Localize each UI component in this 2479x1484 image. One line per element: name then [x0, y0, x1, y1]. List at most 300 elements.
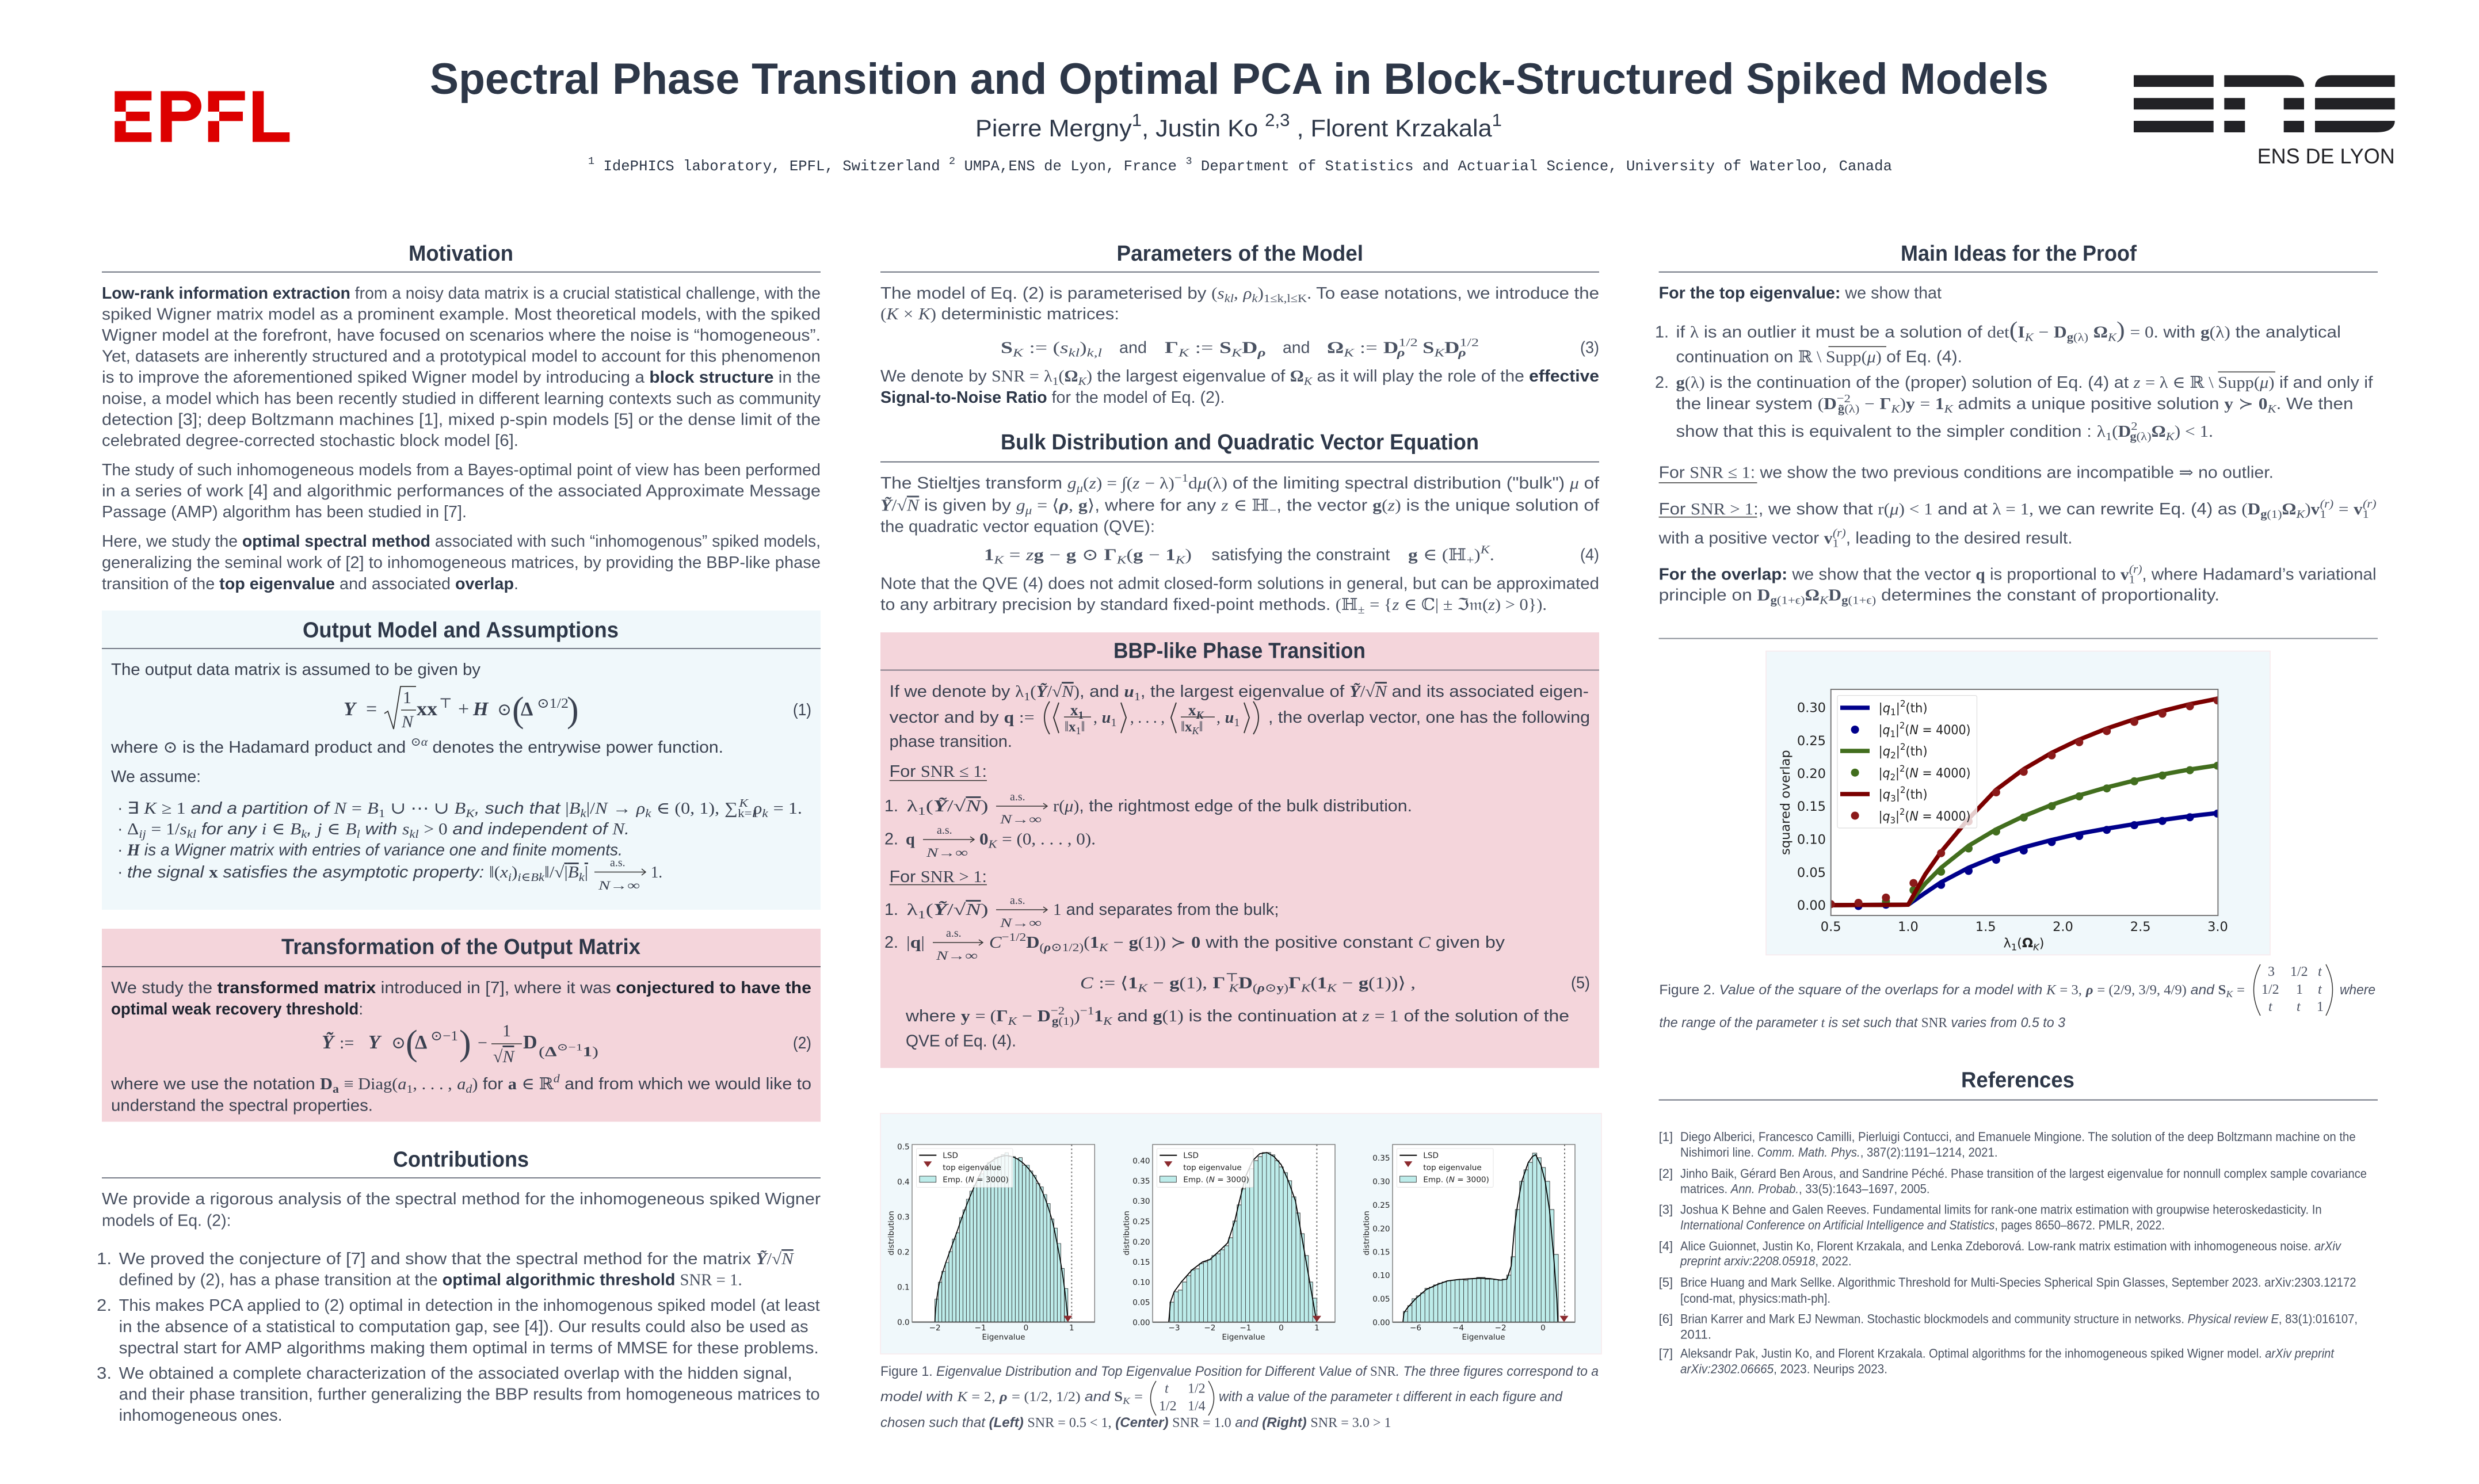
text block: motivation paragraphs: detection [3]; deep Boltzmann machines [1], mixed p-spin models [5] or the dense limit of the	[102, 411, 821, 429]
text: parameterisation: The model of Eq. (2) is parameterised by (skl, ρk)1≤k,l≤K. To ease notations, we introduce the	[880, 284, 1599, 305]
text: overlap: principle on Dg(1+ϵ)ΩKDg(1+ϵ) determines the constant of proportionality.	[1659, 586, 2219, 607]
text: overlap vector definition: , . . . ,	[1130, 709, 1165, 727]
reference 2: matrices. Ann. Probab., 33(5):1643–1697, 2005.	[1680, 1181, 1930, 1196]
text: overlap vector definition: x1	[1070, 701, 1084, 722]
equation 1	[344, 686, 811, 731]
panel: figure 1	[880, 1113, 1601, 1354]
chart: eigenvalue distribution, SNR 1.0: −3	[1168, 1323, 1180, 1333]
text: overlap vector definition: xK	[1188, 701, 1205, 722]
equation 2: (	[406, 1024, 418, 1063]
equation 4: g ∈ (ℍ +)K.	[1408, 543, 1494, 567]
panel: main ideas for the proof	[1655, 242, 2378, 639]
text: contributions intro: models of Eq. (2):	[102, 1212, 231, 1230]
equation 2: ⊙−1	[430, 1029, 458, 1044]
list: assumptions: H is a Wigner matrix with entries of variance one and finite moments.	[127, 841, 623, 860]
reference 1	[1659, 1130, 2356, 1159]
chart: eigenvalue distribution, SNR 1.0: 0.00	[1132, 1318, 1150, 1327]
chart: squared overlap: |q3|2(N = 4000)	[1879, 806, 1971, 826]
chart: eigenvalue distribution, SNR 3.0: 0.20	[1372, 1224, 1390, 1234]
text: case SNR above 1: with a positive vector v1(r), leading to the desired result.	[1658, 527, 2073, 550]
list: assumptions: Δij = 1/skl for any i ∈ Bk, j ∈ Bl with skl > 0 and independent of N.	[127, 820, 630, 841]
equation 1: (	[512, 691, 524, 730]
list: contributions: We proved the conjecture of [7] and show that the spectral method for the matrix Ỹ/√N	[119, 1250, 795, 1268]
reference 2: [2]	[1659, 1166, 1673, 1181]
list: contributions: This makes PCA applied to (2) optimal in detection in the inhomogenous spiked model (at least	[119, 1296, 820, 1315]
text: notation	[110, 1073, 811, 1115]
panel: figure 2	[1766, 651, 2270, 955]
chart: eigenvalue distribution, SNR 3.0: LSD	[1423, 1151, 1439, 1160]
caption: figure 1: chosen such that (Left) SNR = 0.5 < 1, (Center) SNR = 1.0 and (Right) SNR = 3.0 > 1	[880, 1415, 1391, 1430]
text block: motivation paragraphs: Here, we study the optimal spectral method associated with such “inhomogenous” spiked models,	[102, 532, 821, 551]
text: case SNR at most 1: 2.	[884, 830, 898, 848]
reference 6: 2011.	[1680, 1327, 1711, 1341]
caption: figure 2: where	[2340, 982, 2375, 998]
list: assumptions: N→∞	[598, 878, 640, 892]
equation 2: ⊙	[391, 1033, 406, 1052]
list: assumptions: ·	[117, 863, 123, 882]
list: contributions: We obtained a complete characterization of the associated overlap with the hidden signal,	[119, 1364, 792, 1383]
text: case SNR above 1: a.s.	[1010, 894, 1025, 907]
logo: ENS de Lyon	[2134, 75, 2395, 168]
equation 5	[1080, 971, 1590, 995]
chart: eigenvalue distribution, SNR 1.0: 0.05	[1132, 1298, 1150, 1307]
list: contributions: 3.	[97, 1364, 112, 1383]
caption: figure 1: 1/2	[1159, 1399, 1177, 1414]
heading: contributions: Contributions	[393, 1148, 529, 1172]
caption: figure 2: t	[2268, 999, 2273, 1014]
list: assumptions: ∃ K ≥ 1 and a partition of N = B1 ∪ ⋯ ∪ BK, such that |Bk|/N → ρk ∈ (0, 1), ∑k=1K ρk = 1.	[127, 797, 802, 820]
chart: eigenvalue distribution, SNR 1.0: 0.20	[1132, 1238, 1150, 1247]
caption: figure 1: t	[1165, 1382, 1169, 1397]
equation 3: (3)	[1580, 338, 1599, 357]
equation 3: Γ K := S KD ρ	[1165, 338, 1266, 360]
chart: eigenvalue distribution, SNR 0.5	[887, 1143, 1094, 1342]
chart: eigenvalue distribution, SNR 3.0: Emp. (N = 3000)	[1423, 1175, 1489, 1184]
chart: eigenvalue distribution, SNR 1.0: Eigenvalue	[1222, 1333, 1265, 1342]
chart: squared overlap: |q2|2(th)	[1879, 741, 1928, 761]
chart: squared overlap: squared overlap	[1778, 750, 1793, 855]
equation 1: Δ	[521, 699, 533, 720]
text: case SNR above 1: For SNR > 1:	[890, 868, 987, 886]
list: top eigenvalue steps: 2.	[1655, 373, 1669, 392]
chart: squared overlap	[1778, 689, 2228, 952]
list: assumptions	[117, 797, 802, 892]
heading: output model: Output Model and Assumptions	[303, 619, 619, 643]
caption: figure 2: 1	[2296, 982, 2303, 997]
text: case SNR at most 1: N→∞	[926, 845, 968, 860]
text block: motivation paragraphs: noise, a model which has been recently studied in different learning contexts such as community	[102, 390, 821, 408]
chart: squared overlap: 2.5	[2130, 920, 2151, 934]
text: transformed matrix	[111, 979, 811, 1018]
reference 4: Alice Guionnet, Justin Ko, Florent Krzakala, and Lenka Zdeborová. Low-rank matrix estimation with inhomogeneous noise. arXiv	[1680, 1239, 2342, 1253]
equation 3	[1001, 336, 1599, 360]
equation 2: :=	[340, 1033, 354, 1052]
chart: eigenvalue distribution, SNR 1.0: −1	[1240, 1323, 1251, 1333]
equation 2: 1	[502, 1021, 511, 1040]
caption: figure 2: the range of the parameter t is set such that SNR varies from 0.5 to 3	[1659, 1015, 2066, 1031]
chart: eigenvalue distribution, SNR 1.0: 0	[1279, 1323, 1284, 1333]
text: QVE note: Note that the QVE (4) does not admit closed-form solutions in general, but can be approximated	[880, 575, 1599, 593]
list: assumptions: 1.	[651, 864, 662, 882]
reference 7: Aleksandr Pak, Justin Ko, and Florent Krzakala. Optimal algorithms for the inhomogeneous spiked Wigner model. arXiv preprint	[1680, 1346, 2335, 1361]
equation 1: ⊙	[497, 700, 512, 719]
reference 2	[1659, 1166, 2367, 1196]
list: top eigenvalue steps: if λ is an outlier it must be a solution of det(IK − Dg(λ) ΩK) = 0. with g(λ) the analytical	[1676, 317, 2341, 344]
text: case SNR above 1: λ 1(Ỹ/√ N )	[907, 901, 989, 921]
text: case SNR above 1: 1 and separates from the bulk;	[1053, 901, 1279, 919]
text: case SNR at most 1: N→∞	[1000, 812, 1042, 826]
chart: eigenvalue distribution, SNR 3.0	[1362, 1145, 1575, 1342]
chart: eigenvalue distribution, SNR 1.0: 0.15	[1132, 1258, 1150, 1267]
text: case SNR above 1: N→∞	[1000, 915, 1042, 930]
text: we assume: We assume:	[111, 768, 201, 786]
panel: BBP-like phase transition	[880, 632, 1599, 1068]
list: top eigenvalue steps: the linear system (D−2g̃(λ) − ΓK)y = 1K admits a unique positive solution y ≻ 0K. We then	[1676, 392, 2354, 415]
chart: eigenvalue distribution, SNR 1.0: 0.10	[1132, 1278, 1150, 1287]
chart: squared overlap: 0.30	[1797, 701, 1826, 716]
list: top eigenvalue steps: 1.	[1655, 323, 1669, 342]
heading: BBP: BBP-like Phase Transition	[1113, 639, 1366, 663]
text: overlap vector definition	[890, 682, 1590, 751]
text: case SNR above 1	[884, 868, 1505, 963]
equation 2: (2)	[793, 1034, 811, 1052]
equation 1: =	[366, 699, 377, 720]
caption: figure 2: 3	[2268, 964, 2275, 979]
chart: eigenvalue distribution, SNR 1.0: distribution	[1122, 1211, 1131, 1256]
caption: figure 2: 1/2	[2261, 982, 2279, 997]
text: definition of y: QVE of Eq. (4).	[906, 1032, 1016, 1051]
heading: bulk distribution: Bulk Distribution and Quadratic Vector Equation	[1001, 430, 1479, 455]
panel: references	[1659, 1068, 2378, 1376]
text: overlap vector definition: , the overlap vector, one has the following	[1268, 708, 1590, 727]
text block: motivation paragraphs: celebrated degree-corrected stochastic block model [6].	[102, 432, 518, 450]
text: overlap vector definition: , u1	[1093, 708, 1116, 729]
text: overlap vector definition: , u1	[1216, 708, 1240, 729]
text: transformed matrix: optimal weak recovery threshold:	[111, 1000, 363, 1018]
text block: motivation paragraphs: Yet, datasets are inherently structured and a prototypical model to account for this phenomenon	[102, 348, 821, 366]
chart: eigenvalue distribution, SNR 0.5: −1	[975, 1323, 986, 1333]
equation 4	[984, 543, 1599, 567]
caption: figure 2: 1	[2317, 999, 2324, 1014]
text: overlap vector definition: phase transition.	[890, 733, 1012, 751]
equation 5: (5)	[1571, 974, 1590, 992]
chart: eigenvalue distribution, SNR 3.0: −2	[1495, 1323, 1507, 1333]
reference 6: Brian Karrer and Mark EJ Newman. Stochastic blockmodels and community structure in networks. Physical review E, 83(1):016107,	[1680, 1312, 2358, 1326]
caption: figure 2: t	[2318, 982, 2322, 997]
list: contributions	[97, 1250, 820, 1425]
chart: squared overlap: 1.5	[1975, 920, 1996, 934]
chart: eigenvalue distribution, SNR 0.5: 0.2	[897, 1248, 910, 1257]
chart: eigenvalue distribution, SNR 3.0: 0	[1540, 1323, 1546, 1333]
reference 2: Jinho Baik, Gérard Ben Arous, and Sandrine Péché. Phase transition of the largest eigenvalue for nonnull complex sample covariance	[1680, 1166, 2367, 1181]
text: case SNR above 1: a.s.	[946, 927, 962, 940]
equation 2: −	[478, 1033, 487, 1052]
chart: eigenvalue distribution, SNR 1.0: 0.25	[1132, 1218, 1150, 1227]
equation 4: 1K = zg − g ⊙ ΓK(g − 1K)	[984, 546, 1192, 567]
text block: motivation paragraphs: Passage (AMP) algorithm has been studied in [7].	[102, 503, 467, 521]
caption: figure 1: 1/4	[1188, 1399, 1206, 1414]
list: contributions: and their phase transition, further generalizing the BBP results from homogeneous matrices to	[119, 1385, 820, 1403]
list: assumptions: ·	[117, 841, 123, 860]
reference 5: [5]	[1659, 1275, 1673, 1290]
chart: eigenvalue distribution, SNR 0.5: Emp. (N = 3000)	[943, 1175, 1009, 1184]
equation 2: Ỹ	[322, 1032, 335, 1053]
text: contributions intro: We provide a rigorous analysis of the spectral method for the inhomogeneous spiked Wigner	[102, 1190, 821, 1208]
chart: squared overlap: 0.25	[1797, 734, 1826, 749]
chart: squared overlap: 0.5	[1821, 920, 1841, 934]
text: case SNR above 1: For SNR > 1 :, we show that r(μ) < 1 and at λ = 1, we can rewrite Eq. (4) as (Dg(1)ΩK)v1(r) = v1(r)	[1659, 498, 2377, 521]
text: case SNR above 1: |q|	[906, 934, 925, 952]
caption: figure 1: 1/2	[1188, 1382, 1206, 1397]
text: SNR definition: Signal-to-Noise Ratio for the model of Eq. (2).	[880, 388, 1225, 407]
equation 5: C := ⟨ 1K − g(1), Γ⊤KD(ρ⊙y)ΓK(1K − g(1))⟩ ,	[1080, 971, 1416, 995]
equation 3: and	[1119, 338, 1147, 357]
list: contributions: inhomogeneous ones.	[119, 1406, 283, 1425]
reference 3	[1659, 1203, 2322, 1233]
chart: eigenvalue distribution, SNR 0.5: 0.0	[897, 1318, 910, 1327]
text: case SNR at most 1: 1.	[884, 797, 898, 815]
text block: motivation paragraphs: The study of such inhomogeneous models from a Bayes-optimal point of view has been performed	[102, 461, 821, 479]
text: case SNR at most 1: 0K = (0, . . . , 0).	[979, 830, 1096, 851]
heading: references: References	[1961, 1068, 2074, 1092]
reference 5: Brice Huang and Mark Sellke. Algorithmic Threshold for Multi-Species Spherical Spin Glasses, September 2023. arXiv:2303.12172	[1680, 1275, 2356, 1290]
equation 2: D	[523, 1032, 537, 1053]
text: overlap vector definition: ‖xK‖	[1181, 719, 1203, 737]
equation 2: )	[459, 1024, 471, 1063]
equation 4: satisfying the constraint	[1212, 546, 1390, 564]
chart: eigenvalue distribution, SNR 3.0: 0.15	[1372, 1248, 1390, 1257]
reference 4: [4]	[1659, 1239, 1673, 1253]
authors: Pierre Mergny 1, Justin Ko 2,3 , Florent Krzakala 1	[975, 111, 1502, 142]
text: SNR definition: We denote by SNR = λ1(ΩK) the largest eigenvalue of ΩK as it will play the role of the effective	[880, 367, 1599, 388]
equation 4: (4)	[1580, 546, 1599, 564]
chart: squared overlap: 0.10	[1797, 832, 1826, 847]
chart: eigenvalue distribution, SNR 1.0: 1	[1314, 1323, 1319, 1333]
list: assumptions: the signal x satisfies the asymptotic property: ‖(xi)i∈Bk‖/√|Bk|	[127, 863, 588, 884]
chart: eigenvalue distribution, SNR 0.5: 0.4	[897, 1178, 910, 1187]
text: case SNR at most 1: a.s.	[1010, 791, 1025, 803]
caption: figure 1	[880, 1364, 1599, 1430]
text: QVE note: to any arbitrary precision by standard fixed-point methods. (ℍ± = {z ∈ ℂ| ± ℑ𝔪( z) > 0}).	[880, 596, 1547, 616]
chart: squared overlap: λ1(ΩK)	[2004, 936, 2044, 952]
text: parameterisation: (K × K) deterministic matrices:	[880, 305, 1119, 323]
panel: transformation of the output matrix	[102, 929, 821, 1121]
chart: squared overlap: |q1|2(th)	[1879, 698, 1928, 718]
equation 3: Ω K := D 1/2ρ SKD 1/2ρ	[1327, 336, 1479, 360]
chart: eigenvalue distribution, SNR 0.5: 0	[1024, 1323, 1028, 1333]
text: stieltjes transform: The Stieltjes transform gμ(z) = ∫(z − λ)−1dμ(λ) of the limiting spectral distribution ("bulk") μ of	[880, 472, 1599, 495]
text: overlap vector definition: If we denote by λ1(Ỹ/√N), and u1, the largest eigenvalue of Ỹ/√N and its associated eigen-	[890, 682, 1589, 703]
chart: squared overlap: 0.15	[1797, 799, 1826, 814]
affiliations: 1 IdePHICS laboratory, EPFL, Switzerland 2 UMPA,ENS de Lyon, France 3 Department of Statistics and Actuarial Science, University of Waterloo, Canada	[588, 155, 1892, 175]
chart: squared overlap: 1.0	[1898, 920, 1919, 934]
chart: eigenvalue distribution, SNR 3.0: distribution	[1362, 1211, 1371, 1256]
equation 1: ⊙1/2	[537, 696, 569, 711]
equation 1: )	[567, 691, 579, 730]
chart: squared overlap: 0.00	[1797, 898, 1826, 913]
reference 7: arXiv:2302.06665, 2023. Neurips 2023.	[1680, 1361, 1887, 1376]
caption: figure 1: with a value of the parameter t different in each figure and	[1219, 1389, 1563, 1405]
equation 1: (1)	[793, 701, 811, 719]
reference 1: Diego Alberici, Francesco Camilli, Pierluigi Contucci, and Emanuele Mingione. The solution of the deep Boltzmann machine on the	[1680, 1130, 2356, 1144]
chart: squared overlap: 0.20	[1797, 766, 1826, 781]
chart: eigenvalue distribution, SNR 1.0: 0.35	[1132, 1177, 1150, 1186]
chart: squared overlap: |q3|2(th)	[1879, 784, 1928, 804]
chart: eigenvalue distribution, SNR 1.0: top eigenvalue	[1183, 1163, 1242, 1172]
text: case SNR above 1	[1658, 498, 2377, 550]
panel: contributions	[97, 1148, 821, 1425]
text: case SNR at most 1: For SNR ≤ 1: we show the two previous conditions are incompatible ⇒ no outlier.	[1659, 464, 2274, 482]
text: case SNR at most 1: λ 1(Ỹ/√ N )	[907, 797, 989, 818]
text: case SNR at most 1: For SNR ≤ 1:	[890, 762, 987, 781]
equation 2: Δ	[415, 1032, 427, 1053]
list: contributions: 2.	[97, 1296, 112, 1315]
caption: figure 2: t	[2318, 964, 2322, 979]
text: contributions intro	[102, 1190, 821, 1230]
caption: figure 2	[1659, 964, 2375, 1031]
chart: eigenvalue distribution, SNR 3.0: 0.25	[1372, 1201, 1390, 1210]
text: case SNR above 1: C−1/2D(ρ⊙1/2 )(1K − g(1)) ≻ 0 with the positive constant C given by	[989, 931, 1505, 954]
reference 1: Nishimori line. Comm. Math. Phys., 387(2):1191–1214, 2021.	[1680, 1145, 1998, 1159]
caption: figure 2: 1/2	[2290, 964, 2308, 979]
text: stieltjes transform: the quadratic vector equation (QVE):	[880, 518, 1155, 536]
text: overlap vector definition: ‖x1‖	[1065, 719, 1085, 737]
text block: motivation paragraphs	[102, 284, 821, 593]
list: assumptions: a.s.	[610, 857, 626, 869]
text block: motivation paragraphs: in a series of work [4] and algorithmic performances of the associated Approximate Message	[102, 482, 821, 501]
chart: squared overlap: 0.05	[1797, 865, 1826, 880]
text: top eigenvalue: For the top eigenvalue: we show that	[1659, 284, 1942, 303]
reference 5	[1659, 1275, 2356, 1306]
reference 3: Joshua K Behne and Galen Reeves. Fundamental limits for rank-one matrix estimation with groupwise heteroskedasticity. In	[1680, 1203, 2322, 1217]
caption: figure 1: model with K = 2, ρ = (1/2, 1/2) and SK =	[880, 1389, 1143, 1406]
text block: motivation paragraphs: generalizing the seminal work of [2] to inhomogeneous matrices, by providing the BBP-like phase	[102, 554, 821, 572]
text: hadamard note: where ⊙ is the Hadamard product and ⊙α denotes the entrywise power function.	[110, 736, 723, 757]
chart: eigenvalue distribution, SNR 1.0: 0.30	[1132, 1197, 1150, 1206]
chart: squared overlap: |q2|2(N = 4000)	[1879, 763, 1971, 783]
equation 1: xx	[417, 699, 437, 720]
chart: eigenvalue distribution, SNR 0.5: −2	[929, 1323, 941, 1333]
chart: eigenvalue distribution, SNR 3.0: 0.35	[1372, 1154, 1390, 1163]
reference 4: preprint arxiv:2208.05918, 2022.	[1680, 1254, 1852, 1268]
equation 1: ⊤	[439, 696, 452, 711]
chart: eigenvalue distribution, SNR 1.0: −2	[1204, 1323, 1215, 1333]
chart: eigenvalue distribution, SNR 3.0: −6	[1410, 1323, 1421, 1333]
chart: eigenvalue distribution, SNR 0.5: distribution	[887, 1211, 896, 1256]
panel: output model and assumptions	[102, 611, 821, 910]
panel: bulk distribution and QVE	[880, 430, 1599, 616]
text: stieltjes transform: Ỹ/√N is given by gμ = ⟨ρ, g⟩, where for any z ∈ ℍ −, the vector g(z) is the unique solution of	[880, 496, 1599, 517]
equation 2: √N	[493, 1047, 515, 1066]
chart: eigenvalue distribution, SNR 1.0: Emp. (N = 3000)	[1183, 1175, 1249, 1184]
text: QVE note	[880, 575, 1599, 616]
chart: squared overlap: |q1|2(N = 4000)	[1879, 720, 1971, 739]
chart: eigenvalue distribution, SNR 3.0: top eigenvalue	[1423, 1163, 1482, 1172]
chart: eigenvalue distribution, SNR 1.0: LSD	[1183, 1151, 1199, 1160]
chart: eigenvalue distribution, SNR 0.5: 0.3	[897, 1213, 910, 1222]
logo: ENS de Lyon: ENS DE LYON	[2257, 144, 2395, 168]
list: top eigenvalue steps: show that this is equivalent to the simpler condition : λ1(D2g(λ)ΩK) < 1.	[1676, 420, 2213, 443]
chart: eigenvalue distribution, SNR 0.5: 0.1	[897, 1283, 910, 1292]
chart: squared overlap: 3.0	[2207, 920, 2228, 934]
chart: eigenvalue distribution, SNR 0.5: Eigenvalue	[982, 1333, 1025, 1342]
list: top eigenvalue steps: continuation on ℝ \ Supp(μ) of Eq. (4).	[1676, 348, 1962, 367]
reference 3: International Conference on Artificial Intelligence and Statistics, pages 8650–8672. PMLR, 2022.	[1680, 1218, 2165, 1233]
text: stieltjes transform	[880, 472, 1599, 536]
heading: main ideas: Main Ideas for the Proof	[1901, 242, 2137, 266]
equation 1: N	[401, 712, 414, 731]
reference 1: [1]	[1659, 1130, 1673, 1144]
text block: motivation paragraphs: transition of the top eigenvalue and associated overlap.	[102, 575, 518, 593]
chart: eigenvalue distribution, SNR 3.0: 0.00	[1372, 1318, 1390, 1327]
list: contributions: in the absence of a statistical to computation gap, see [4]). Our results could also be used as	[119, 1318, 808, 1336]
text: SNR definition	[880, 367, 1599, 407]
chart: eigenvalue distribution, SNR 3.0: 0.10	[1372, 1271, 1390, 1280]
equation 1: Y	[344, 699, 357, 720]
chart: eigenvalue distribution, SNR 1.0: 0.40	[1132, 1157, 1150, 1166]
text: transformed matrix: We study the transformed matrix introduced in [7], where it was conjectured to have the	[111, 979, 811, 997]
chart: eigenvalue distribution, SNR 3.0: 0.05	[1372, 1295, 1390, 1304]
reference 4	[1659, 1239, 2342, 1268]
equation 1: 1	[403, 688, 411, 707]
text block: motivation paragraphs: Low-rank information extraction from a noisy data matrix is a crucial statistical challenge, with the	[102, 284, 821, 303]
heading: transformation: Transformation of the Output Matrix	[281, 935, 640, 959]
panel: parameters of the model	[880, 242, 1599, 407]
list: assumptions: ·	[117, 799, 123, 818]
reference 6: [6]	[1659, 1312, 1673, 1326]
equation 1: +	[458, 699, 469, 720]
list: contributions: defined by (2), has a phase transition at the optimal algorithmic threshold SNR = 1.	[119, 1271, 742, 1290]
text: parameterisation	[880, 284, 1599, 323]
title: Spectral Phase Transition and Optimal PCA in Block-Structured Spiked Models	[430, 55, 2049, 104]
chart: squared overlap: 2.0	[2053, 920, 2073, 934]
text block: motivation paragraphs: Wigner model at the forefront, have focused on scenarios where the noise is “homogeneous”.	[102, 326, 821, 345]
logo: EPFL	[115, 91, 289, 142]
equation 3: and	[1283, 338, 1310, 357]
reference 7: [7]	[1659, 1346, 1673, 1361]
equation 3: SK := ( skl)k,l	[1001, 338, 1102, 360]
caption: figure 2: Figure 2. Value of the square of the overlaps for a model with K = 3, ρ = (2/9, 3/9, 4/9) and SK =	[1659, 982, 2245, 999]
text: case SNR above 1: N→∞	[936, 948, 978, 963]
reference 5: [cond-mat, physics:math-ph].	[1680, 1291, 1830, 1306]
text: overlap	[1659, 563, 2377, 607]
reference 6	[1659, 1312, 2358, 1341]
text: case SNR at most 1: a.s.	[937, 824, 952, 837]
equation 2	[322, 1021, 811, 1066]
text block: motivation paragraphs: is to improve the aforementioned spiked Wigner model by introducing a block structure in the	[102, 368, 821, 387]
reference 3: [3]	[1659, 1203, 1673, 1217]
text: case SNR at most 1: r(μ), the rightmost edge of the bulk distribution.	[1053, 797, 1412, 815]
text: case SNR above 1: 2.	[884, 933, 898, 952]
text: definition of y: where y = (ΓK − D−2g(1))−11K and g(1) is the continuation at z = 1 of the solution of the	[905, 1005, 1569, 1028]
chart: eigenvalue distribution, SNR 0.5: top eigenvalue	[943, 1163, 1001, 1172]
text: definition of y	[905, 1005, 1569, 1051]
list: contributions: spectral start for AMP algorithms making them optimal in terms of MMSE for these problems.	[119, 1339, 819, 1357]
equation 1: H	[472, 699, 489, 720]
text: notation: understand the spectral properties.	[111, 1097, 373, 1115]
list: top eigenvalue steps	[1655, 317, 2373, 443]
text: notation: where we use the notation Da ≡ Diag(a1, . . . , ad) for a ∈ ℝd and from which we would like to	[110, 1073, 811, 1096]
list: top eigenvalue steps: g(λ) is the continuation of the (proper) solution of Eq. (4) at z = λ ∈ ℝ \ Supp( μ) if and only if	[1676, 373, 2373, 392]
chart: eigenvalue distribution, SNR 0.5: LSD	[943, 1151, 958, 1160]
chart: eigenvalue distribution, SNR 3.0: −4	[1452, 1323, 1464, 1333]
text: case SNR at most 1: q	[906, 831, 915, 848]
caption: figure 1: Figure 1. Eigenvalue Distribution and Top Eigenvalue Position for Different Value of SNR. The three figures correspond to a	[880, 1364, 1599, 1379]
panel: motivation	[102, 242, 821, 593]
chart: eigenvalue distribution, SNR 3.0: Eigenvalue	[1462, 1333, 1505, 1342]
heading: parameters: Parameters of the Model	[1116, 242, 1363, 266]
chart: eigenvalue distribution, SNR 1.0	[1122, 1145, 1335, 1342]
